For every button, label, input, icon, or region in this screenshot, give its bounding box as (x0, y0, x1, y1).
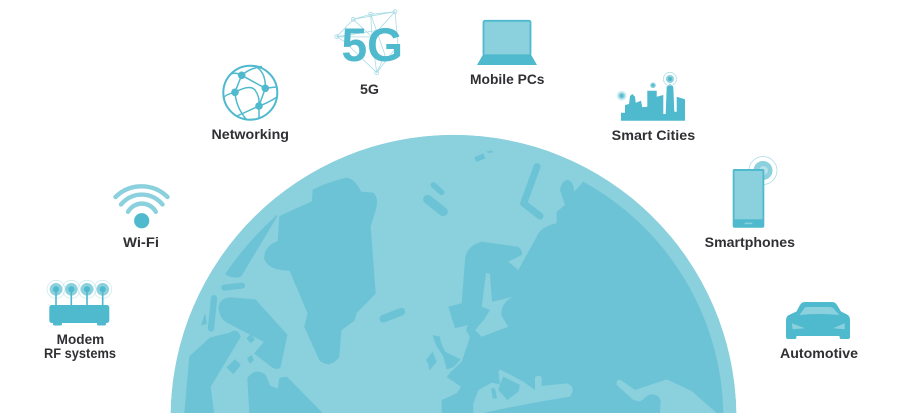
network nodes (231, 72, 269, 110)
Iceland (383, 312, 401, 319)
Ireland (426, 352, 437, 371)
meridians (224, 66, 277, 119)
signal halos (50, 283, 109, 296)
modem body (49, 305, 109, 326)
icon: smartphone (733, 156, 777, 228)
antennas (53, 286, 106, 306)
beacons (617, 72, 677, 101)
headlights (792, 323, 845, 329)
phone body (733, 169, 764, 228)
Greenland (265, 178, 376, 363)
Mediterranean island (491, 388, 497, 398)
narrow island (211, 298, 214, 328)
label: Smart Cities: Smart Cities (612, 128, 695, 143)
signal rings (47, 280, 112, 298)
label: 5G: 5G (360, 82, 379, 97)
icon: modem (47, 280, 112, 326)
Italy (498, 377, 520, 400)
Persian Gulf and Indian Ocean (617, 379, 717, 413)
label: Networking: Networking (212, 127, 289, 142)
icon: Wi-Fi (116, 186, 168, 228)
signal halo (754, 161, 772, 180)
label: Mobile PCs: Mobile PCs (470, 72, 544, 87)
label: Smartphones: Smartphones (705, 235, 795, 250)
home button (744, 223, 752, 224)
laptop base (477, 55, 537, 65)
Great Britain (433, 335, 461, 369)
North America west (185, 331, 240, 413)
5G mark: 5G (342, 18, 403, 71)
Franz Josef Land (474, 151, 493, 162)
Svalbard (433, 185, 442, 192)
laptop screen (484, 21, 530, 55)
Eurasia (442, 180, 723, 413)
Svalbard main (428, 199, 443, 212)
signal circles (749, 156, 777, 184)
ocean (171, 135, 736, 413)
Mediterranean (473, 369, 573, 413)
small islands (227, 335, 254, 373)
globe (171, 135, 736, 413)
Ellesmere strip (226, 216, 277, 277)
windshield (800, 307, 840, 315)
icon: smart city (617, 72, 685, 121)
icon: 5G (335, 10, 403, 75)
southern Europe details (426, 335, 717, 413)
arctic island (224, 286, 242, 288)
icon: networking globe (223, 66, 277, 120)
wifi dot (134, 213, 149, 228)
label: Automotive: Automotive (780, 346, 859, 361)
label: Modem: Modem (57, 332, 104, 347)
northern islands (474, 151, 540, 216)
Baltic Sea (475, 273, 513, 337)
phone screen (734, 171, 762, 219)
Baffin Island (219, 298, 287, 368)
mesh lines (335, 10, 398, 75)
North America east (248, 372, 322, 413)
label: Wi-Fi: Wi-Fi (123, 235, 159, 250)
Novaya Zemlya (524, 167, 540, 216)
wifi arcs (116, 186, 168, 212)
skyline (621, 84, 685, 121)
car body (786, 302, 850, 339)
sliver island (202, 315, 206, 325)
signal core (759, 166, 768, 175)
globe outline (223, 66, 277, 120)
icon: laptop (477, 21, 537, 65)
western landmasses (185, 178, 443, 413)
label: RF systems: RF systems (44, 346, 116, 361)
icon: car (786, 302, 850, 339)
